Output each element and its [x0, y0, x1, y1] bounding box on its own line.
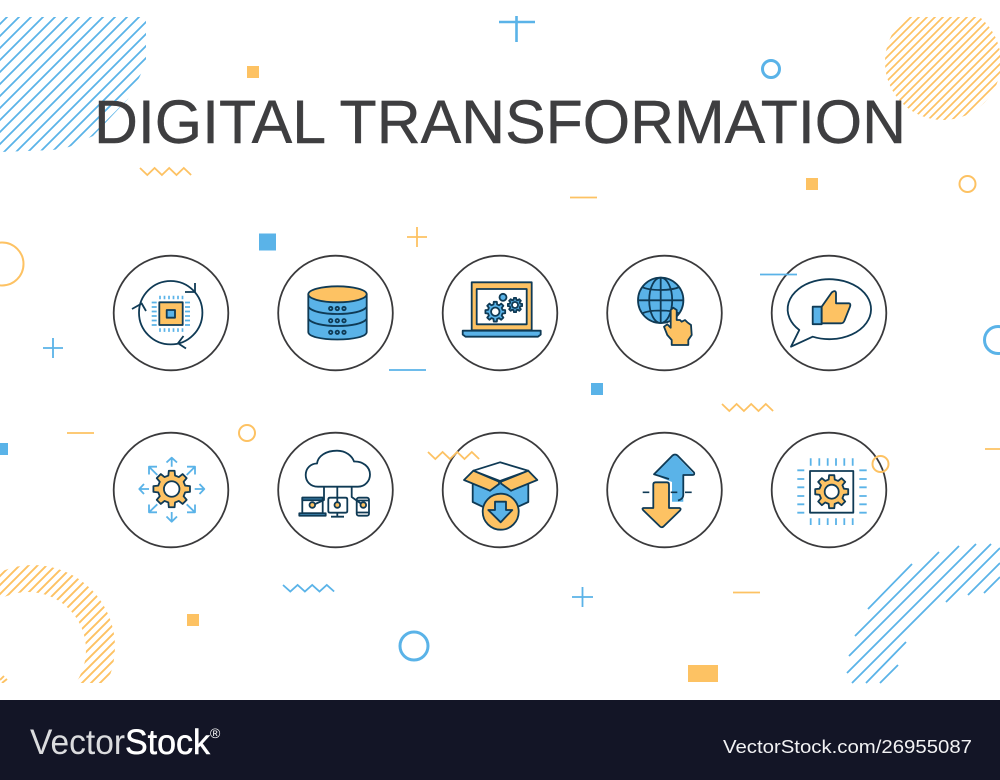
- icon: upload and download arrows: [642, 454, 694, 527]
- icon: gear with outward arrows: [139, 458, 204, 522]
- hatched blue shape top left: [0, 17, 146, 152]
- icon: cloud connected to devices: [299, 451, 370, 517]
- orange decorative elements: [0, 66, 1000, 682]
- footer logo: [30, 723, 221, 762]
- hatched orange ring bottom left: [0, 565, 115, 683]
- footer logo: Vector: [30, 723, 125, 762]
- icon: database: [308, 286, 367, 340]
- icon rings: [114, 256, 886, 547]
- title: DIGITAL TRANSFORMATION: [94, 88, 906, 156]
- footer image id: VectorStock.com/26955087: [723, 737, 972, 757]
- hatched blue band bottom right: [847, 544, 1000, 683]
- icon: open box with download arrow: [464, 462, 537, 530]
- icon: processor with rotating arrows: [132, 281, 202, 348]
- icon: globe with pointing hand: [638, 278, 692, 345]
- icon: speech bubble with thumbs up: [788, 279, 871, 347]
- hatched orange circle top right: [885, 17, 1000, 120]
- footer logo: Stock: [125, 723, 210, 762]
- icon: chip with gear: [797, 458, 867, 525]
- footer bar: [0, 700, 1000, 780]
- icon: laptop with gears: [463, 282, 541, 337]
- footer logo: ®: [210, 725, 221, 741]
